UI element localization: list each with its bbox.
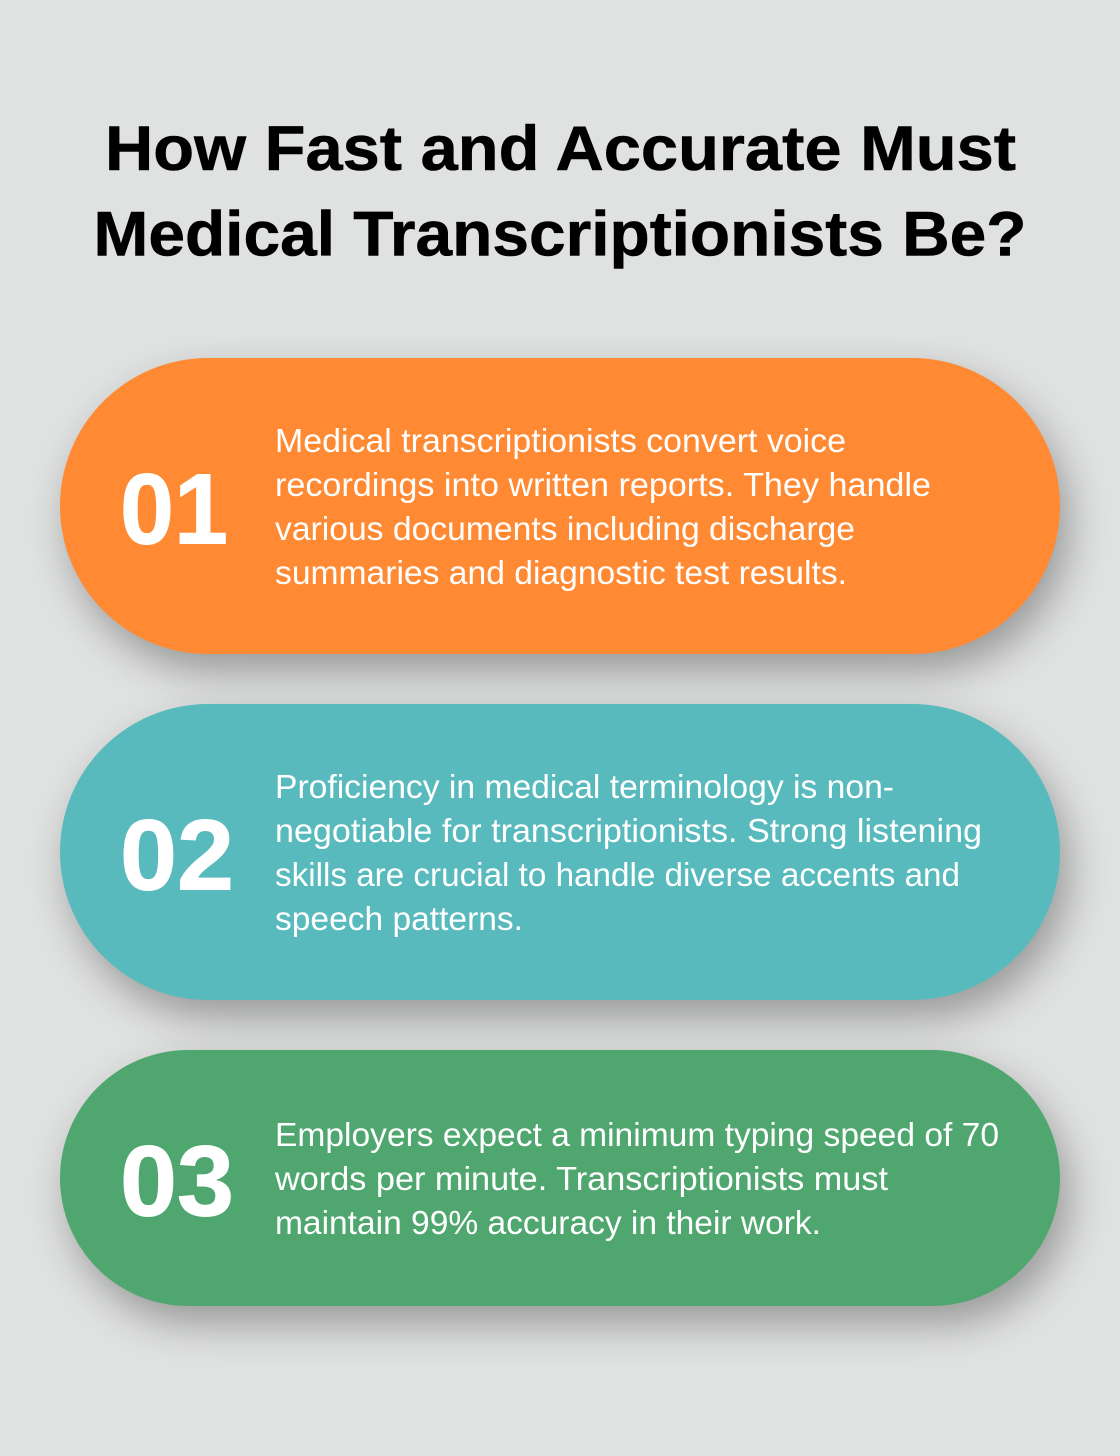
text: step 01 description	[275, 422, 931, 591]
text: step 02 description: speech patterns.	[275, 900, 523, 937]
text: step 02 description: skills are crucial to handle diverse accents and	[275, 856, 960, 893]
title: Medical Transcriptionists Be?	[94, 200, 1026, 270]
text: step 03 description	[274, 1116, 999, 1241]
text: step 02 description: Proficiency in medical terminology is non-	[275, 768, 894, 805]
title: How Fast and Accurate Must	[105, 114, 1016, 184]
text: step 01 description: recordings into written reports. They handle	[275, 466, 931, 503]
number 01: 01	[120, 454, 228, 566]
number 03: 03	[120, 1126, 234, 1238]
text: step 03 description: maintain 99% accuracy in their work.	[275, 1204, 821, 1241]
text: step 02 description: negotiable for transcriptionists. Strong listening	[275, 812, 982, 849]
title	[94, 114, 1026, 270]
panel: step 02	[60, 704, 1060, 1000]
text: step 03 description: words per minute. Transcriptionists must	[274, 1160, 888, 1197]
text: step 02 description	[275, 768, 982, 937]
panel: step 01	[60, 358, 1060, 654]
number 02: 02	[120, 800, 234, 912]
panel: step 03	[60, 1050, 1060, 1306]
text: step 01 description: Medical transcriptionists convert voice	[275, 422, 846, 459]
text: step 01 description: various documents including discharge	[275, 510, 855, 547]
text: step 03 description: Employers expect a minimum typing speed of 70	[275, 1116, 999, 1153]
text: step 01 description: summaries and diagnostic test results.	[275, 554, 847, 591]
